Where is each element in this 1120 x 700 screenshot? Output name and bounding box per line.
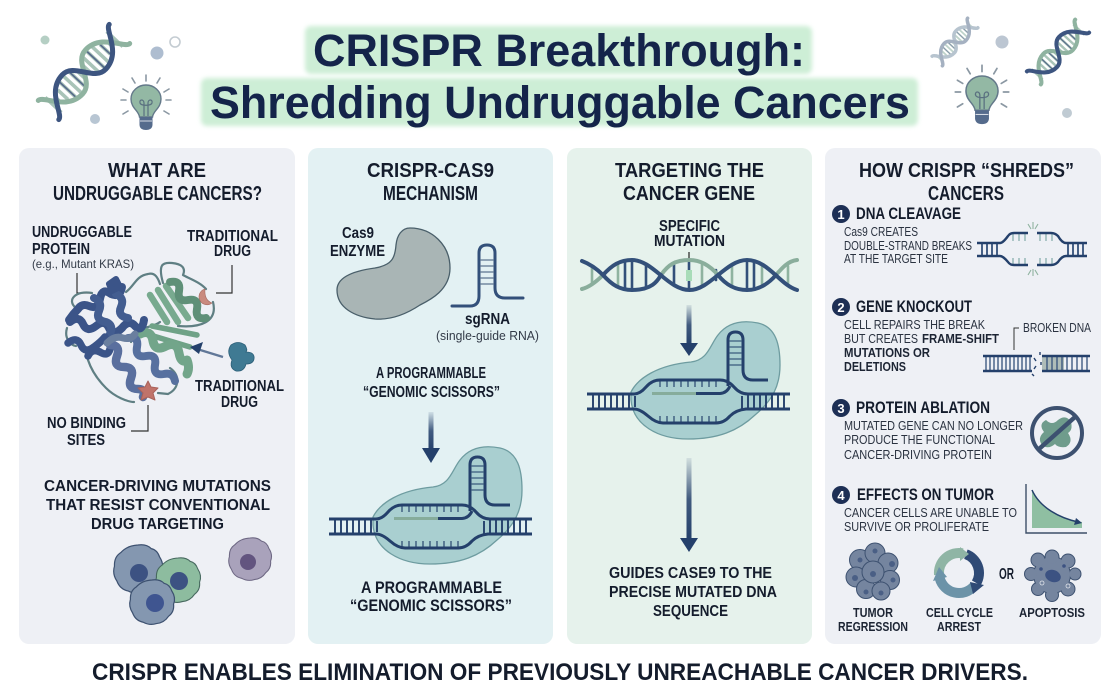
heading: HOW CRISPR “SHREDS”	[859, 160, 1074, 182]
chart: tumor decline	[1026, 484, 1087, 533]
step 4: effects on tumor: SURVIVE OR PROLIFERATE	[844, 519, 989, 534]
heading: MECHANISM	[383, 183, 478, 205]
step 3: protein ablation: PRODUCE THE FUNCTIONAL	[844, 432, 995, 447]
label: broken DNA	[1014, 320, 1091, 350]
drug pocket	[199, 289, 212, 305]
title: CRISPR Breakthrough:	[313, 25, 805, 76]
arrow down	[680, 305, 698, 356]
arrow: drug to protein	[190, 342, 223, 357]
step 2: gene knockout: CELL REPAIRS THE BREAK	[844, 317, 985, 332]
label: traditional drug bottom: DRUG	[221, 394, 258, 411]
protein ribbon structure	[66, 263, 214, 402]
heading: CRISPR-CAS9	[367, 160, 494, 182]
heading: CANCER GENE	[623, 183, 755, 205]
label: traditional drug bottom: TRADITIONAL	[195, 378, 284, 395]
label: or: OR	[999, 566, 1014, 583]
step 2: gene knockout	[832, 297, 999, 374]
icon: cell cycle arrest	[933, 547, 984, 594]
label: undruggable protein: UNDRUGGABLE	[32, 224, 132, 241]
step 3: protein ablation: MUTATED GENE CAN NO LONGER	[844, 418, 1023, 433]
heading	[859, 160, 1074, 205]
icon: right light bulb	[955, 65, 1009, 124]
step 3: protein ablation	[832, 398, 1023, 462]
text: guides Cas9: GUIDES CASE9 TO THE	[609, 565, 772, 582]
step 3: protein ablation: PROTEIN ABLATION	[856, 398, 990, 417]
icon: broken DNA	[983, 352, 1090, 376]
heading	[53, 160, 262, 205]
text: resistant mutations	[44, 478, 271, 533]
label: sgRNA	[436, 311, 539, 343]
text: guides Cas9: PRECISE MUTATED DNA	[609, 584, 777, 601]
step 1: DNA cleavage: AT THE TARGET SITE	[844, 251, 948, 266]
step 4: effects on tumor	[832, 485, 1017, 534]
labels: outcomes: ARREST	[937, 619, 981, 634]
panel: CRISPR-Cas9 mechanism	[308, 148, 553, 644]
labels: outcomes: APOPTOSIS	[1019, 605, 1085, 620]
decorative dots left	[40, 36, 180, 124]
label: traditional drug bottom	[195, 378, 284, 411]
step 1: DNA cleavage: Cas9 CREATES	[844, 224, 918, 239]
panel: what are undruggable cancers	[19, 148, 295, 644]
Cas9 DNA complex	[587, 322, 790, 439]
label: undruggable protein: PROTEIN	[32, 241, 90, 258]
cancer cells	[114, 538, 272, 624]
icon: cut DNA	[977, 222, 1087, 276]
heading: UNDRUGGABLE CANCERS?	[53, 183, 262, 205]
label: traditional drug top: DRUG	[214, 243, 251, 260]
text: genomic scissors upper	[363, 365, 500, 401]
text: genomic scissors upper: A PROGRAMMABLE	[376, 365, 486, 382]
icon: tumor regression cluster	[846, 543, 900, 600]
step 2: gene knockout: BUT CREATES	[844, 331, 918, 346]
step 2: gene knockout: FRAME-SHIFT	[922, 331, 999, 346]
title	[201, 25, 918, 128]
step 3: protein ablation: 3	[837, 401, 845, 416]
label: specific mutation: MUTATION	[654, 233, 725, 250]
heading: WHAT ARE	[108, 160, 206, 182]
label: no binding sites: NO BINDING	[47, 415, 126, 432]
label: traditional drug top: TRADITIONAL	[187, 228, 278, 245]
step 2: gene knockout: 2	[837, 300, 845, 315]
step 2: gene knockout: DELETIONS	[844, 359, 906, 374]
label: sgRNA: (single-guide RNA)	[436, 328, 539, 343]
icon: sgRNA	[452, 245, 523, 306]
step 2: gene knockout: GENE KNOCKOUT	[856, 297, 972, 316]
step 1: DNA cleavage	[832, 204, 972, 266]
label: Cas9 enzyme: Cas9	[342, 225, 374, 242]
step 2: gene knockout: MUTATIONS OR	[844, 345, 931, 360]
arrow down	[422, 412, 440, 463]
icon: drug molecule	[229, 342, 254, 371]
heading: TARGETING THE	[615, 160, 764, 182]
step 4: effects on tumor: 4	[837, 488, 845, 503]
footer statement: CRISPR ENABLES ELIMINATION OF PREVIOUSLY UNREACHABLE CANCER DRIVERS.	[92, 659, 1028, 686]
text: guides Cas9	[609, 565, 777, 620]
step 4: effects on tumor: EFFECTS ON TUMOR	[857, 485, 994, 504]
star: no binding site	[138, 381, 158, 400]
text: genomic scissors lower: A PROGRAMMABLE	[361, 578, 502, 597]
text: genomic scissors lower: “GENOMIC SCISSORS”	[350, 596, 512, 615]
label: traditional drug top	[187, 228, 278, 293]
text: guides Cas9: SEQUENCE	[653, 603, 728, 620]
text: resistant mutations: DRUG TARGETING	[91, 516, 224, 533]
text: genomic scissors lower	[350, 578, 512, 615]
label: specific mutation: SPECIFIC	[659, 218, 720, 235]
icon: apoptosis	[1024, 550, 1082, 602]
step 1: DNA cleavage: 1	[837, 207, 845, 222]
panel: how CRISPR shreds cancers	[825, 148, 1101, 644]
text: resistant mutations: THAT RESIST CONVENTIONAL	[46, 497, 270, 514]
label: sgRNA: sgRNA	[465, 311, 510, 328]
icon: right small grey DNA helix	[932, 18, 978, 66]
decorative dots right	[996, 36, 1072, 118]
step 1: DNA cleavage: DOUBLE-STRAND BREAKS	[844, 238, 972, 253]
label: no binding sites	[47, 405, 148, 449]
label: specific mutation	[654, 218, 725, 265]
label: broken DNA: BROKEN DNA	[1023, 320, 1091, 335]
heading: CANCERS	[928, 183, 1004, 205]
title: Shredding Undruggable Cancers	[210, 77, 910, 128]
labels: outcomes: CELL CYCLE	[926, 605, 993, 620]
heading	[615, 160, 764, 205]
labels: outcomes: REGRESSION	[838, 619, 908, 634]
label: no binding sites: SITES	[67, 432, 105, 449]
icon: left DNA helix	[38, 24, 130, 120]
text: genomic scissors upper: “GENOMIC SCISSORS”	[363, 384, 500, 401]
icon: right DNA helix	[1027, 20, 1089, 84]
step 3: protein ablation: CANCER-DRIVING PROTEIN	[844, 447, 992, 462]
text: resistant mutations: CANCER-DRIVING MUTATIONS	[44, 478, 271, 495]
icon: Cas9 enzyme	[337, 228, 450, 319]
icon: no protein	[1032, 408, 1082, 458]
icon: left light bulb	[121, 75, 171, 130]
labels: outcomes	[838, 605, 1085, 634]
label: undruggable protein	[32, 224, 134, 293]
arrow down long	[680, 458, 698, 552]
Cas9 DNA complex	[329, 447, 532, 564]
step 4: effects on tumor: CANCER CELLS ARE UNABLE TO	[844, 505, 1017, 520]
labels: outcomes: TUMOR	[853, 605, 894, 620]
label: Cas9 enzyme	[330, 225, 385, 260]
step 1: DNA cleavage: DNA CLEAVAGE	[856, 204, 961, 223]
heading	[367, 160, 494, 205]
DNA double helix	[582, 260, 797, 290]
label: undruggable protein: (e.g., Mutant KRAS)	[32, 257, 134, 271]
label: Cas9 enzyme: ENZYME	[330, 243, 385, 260]
panel: targeting the cancer gene	[567, 148, 812, 644]
